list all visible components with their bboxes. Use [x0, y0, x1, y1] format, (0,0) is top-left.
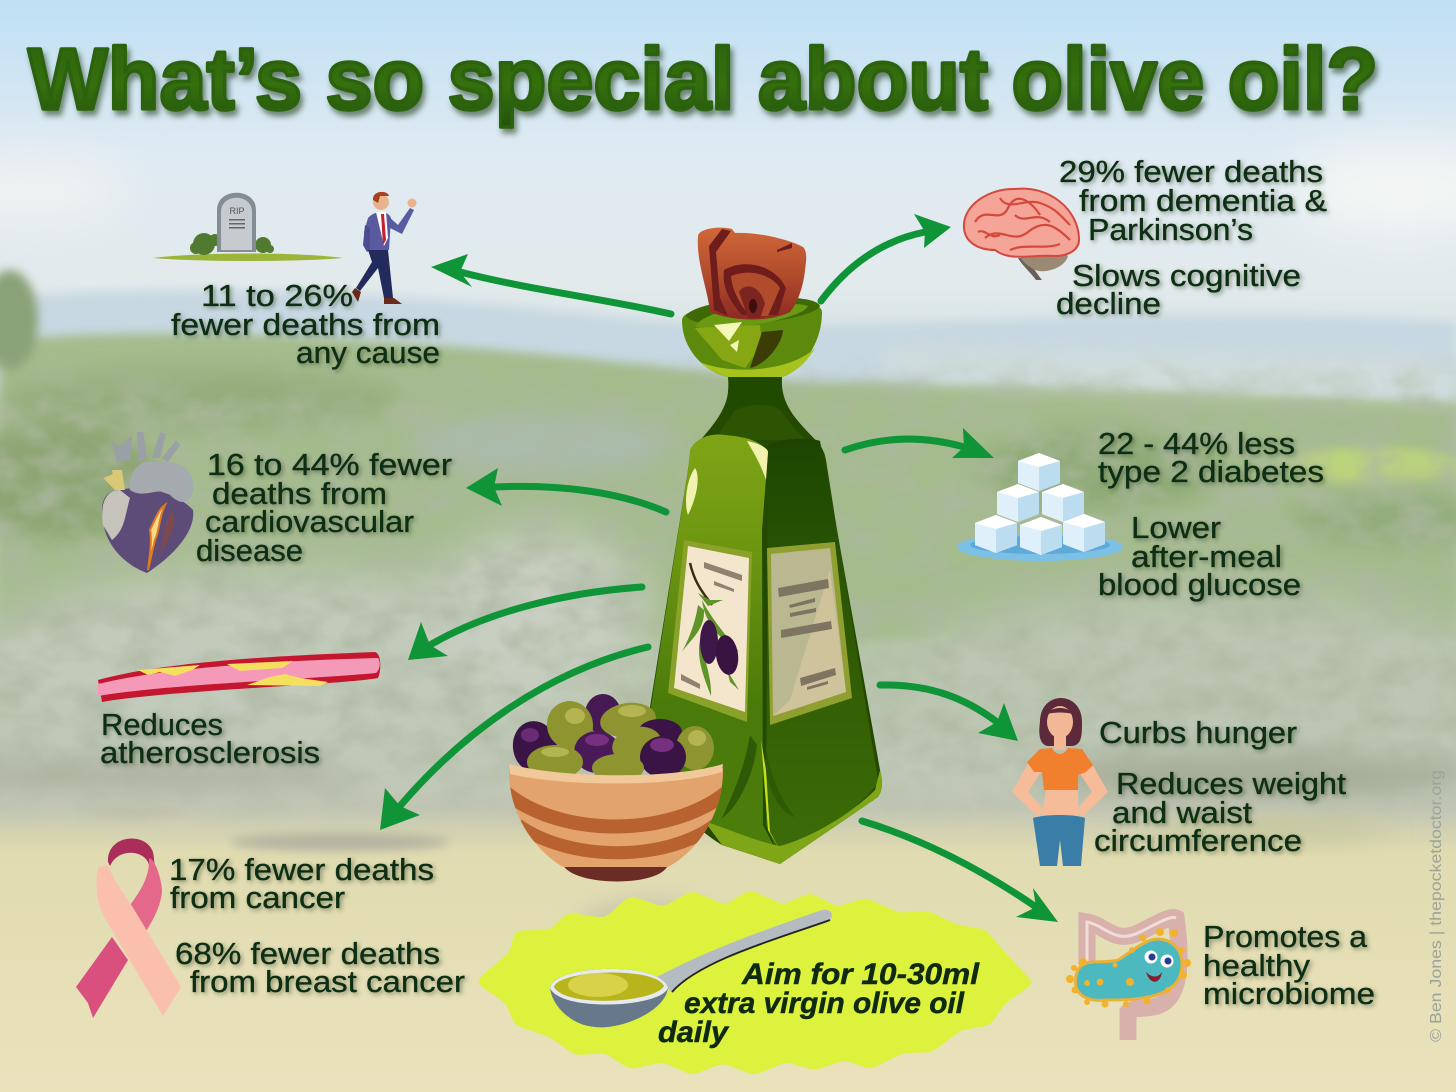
icon: brain	[964, 189, 1079, 280]
bowl of olives	[505, 694, 727, 882]
icon: ribbon	[76, 838, 181, 1018]
text: cardiovascular	[205, 504, 414, 539]
left bottle face	[651, 435, 780, 858]
text: fewer deaths from	[171, 307, 440, 342]
panel: cancer	[76, 838, 465, 1018]
text: Curbs hunger	[1099, 715, 1297, 750]
text	[169, 852, 465, 999]
wooden bowl	[505, 764, 727, 882]
text: from dementia &	[1079, 183, 1327, 218]
panel: atherosclerosis	[98, 652, 380, 770]
callout: daily dose	[475, 890, 1034, 1075]
callout text: daily	[658, 1016, 729, 1049]
text: microbiome	[1203, 976, 1375, 1011]
icon: spoon of oil	[550, 910, 832, 1027]
right bottle face	[766, 439, 878, 858]
icon: artery	[98, 652, 380, 702]
text: 11 to 26%	[201, 278, 353, 313]
arrow: all-cause deaths	[431, 254, 671, 314]
text	[1098, 426, 1324, 602]
text: circumference	[1094, 823, 1302, 858]
arrow: cancer	[380, 647, 648, 830]
icon: walking man	[352, 192, 416, 304]
arrow: weight	[880, 685, 1018, 741]
text	[1203, 919, 1375, 1011]
text: healthy	[1203, 948, 1311, 983]
text: atherosclerosis	[100, 735, 320, 770]
side label	[767, 542, 852, 725]
text: any cause	[296, 335, 440, 370]
text: deaths from	[212, 476, 387, 511]
text: from cancer	[170, 880, 345, 915]
text: Reduces	[101, 707, 223, 742]
starburst background	[475, 890, 1034, 1075]
text: decline	[1056, 286, 1161, 321]
text: 29% fewer deaths	[1059, 154, 1323, 189]
arrow: heart	[466, 468, 666, 512]
text: after-meal	[1131, 539, 1282, 574]
arrow: diabetes	[845, 428, 994, 458]
text: Lower	[1131, 510, 1221, 545]
arrows from bottle to benefits	[380, 214, 1058, 922]
callout text: extra virgin olive oil	[684, 987, 965, 1020]
olives	[509, 694, 714, 782]
text	[1094, 715, 1346, 858]
panel: microbiome	[1066, 917, 1375, 1040]
text: Parkinson’s	[1088, 212, 1253, 247]
panel: brain health	[964, 154, 1327, 321]
panel: cardiovascular	[102, 432, 452, 573]
bottle silhouette	[650, 376, 882, 864]
arrow: atherosclerosis	[408, 587, 642, 660]
text: type 2 diabetes	[1098, 454, 1324, 489]
callout text: Aim for 10-30ml	[741, 958, 980, 991]
text: Slows cognitive	[1072, 258, 1301, 293]
icon: heart	[102, 432, 193, 573]
panel: diabetes	[957, 426, 1324, 602]
text: from breast cancer	[190, 964, 465, 999]
text: Reduces weight	[1116, 766, 1346, 801]
callout text	[658, 958, 980, 1049]
icon: woman	[1012, 698, 1108, 866]
text: disease	[196, 533, 303, 568]
cork stopper	[698, 228, 806, 320]
text: Promotes a	[1203, 919, 1368, 954]
arrow: microbiome	[862, 821, 1058, 922]
text: 68% fewer deaths	[175, 936, 440, 971]
bottle neck	[724, 376, 788, 410]
text: blood glucose	[1098, 567, 1301, 602]
credit: © Ben Jones | thepocketdoctor.org	[1428, 770, 1445, 1042]
title: What’s so special about olive oil?	[28, 31, 1378, 128]
panel: weight	[1012, 698, 1346, 866]
panel: all-cause mortality	[153, 192, 440, 370]
icon: intestine and microbe	[1066, 917, 1191, 1040]
text	[171, 278, 440, 370]
icon: gravestone	[153, 193, 343, 261]
text	[100, 707, 320, 770]
icon: gravestone: RIP	[229, 206, 245, 216]
olive oil bottle	[650, 228, 882, 864]
icon: sugar cubes	[957, 453, 1123, 561]
text: 22 - 44% less	[1098, 426, 1295, 461]
arrow: brain	[821, 214, 951, 301]
front label with olive sprig	[668, 540, 752, 722]
bottle neck ring	[682, 297, 822, 377]
text: and waist	[1112, 795, 1252, 830]
text: 16 to 44% fewer	[207, 447, 452, 482]
text	[196, 447, 452, 568]
text: 17% fewer deaths	[169, 852, 434, 887]
text	[1056, 154, 1327, 321]
